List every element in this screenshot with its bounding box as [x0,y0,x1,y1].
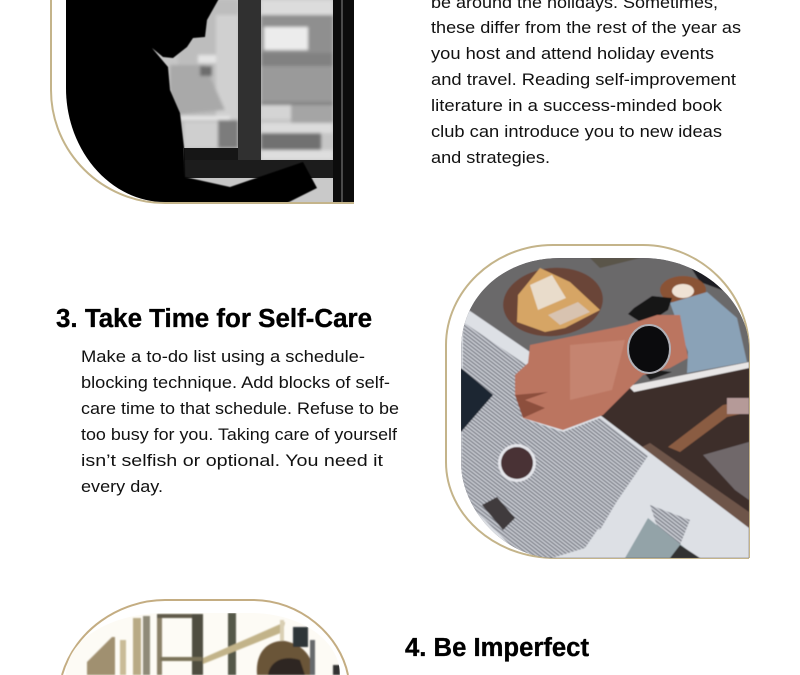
plate of food [502,268,604,336]
text block: point 3 body: care time to that schedule. Refuse to be [81,400,399,418]
text block: point 3 body [81,348,399,496]
table [461,258,749,385]
text block: point 2 body [431,0,741,167]
text block: point 2 body: you host and attend holiday events [431,45,714,63]
watch strap [628,296,672,325]
photo: wristwatch over a newspaper [446,245,749,558]
text block: point 2 body: and strategies. [431,149,550,167]
text block: point 3 body: every day. [81,478,163,496]
photo: person by a bright window [60,600,348,675]
text block: point 3 body: Make a to-do list using a schedule- [81,348,365,366]
latte cup [660,276,706,304]
photo: silhouette reading by a window [51,0,354,205]
text block: point 2 body: club can introduce you to new ideas [431,123,722,141]
text block: point 2 body: these differ from the rest of the year as [431,19,741,37]
heading: point 3: 3. Take Time for Self-Care [56,305,372,333]
dark wood lower right [602,368,749,512]
text block: point 3 body: too busy for you. Taking care of yourself [81,426,397,444]
arm and hand [515,315,688,430]
watch face [628,325,670,373]
newspaper body [461,305,749,558]
text block: point 3 body: isn’t selfish or optional. You need it [81,452,384,470]
text block: point 3 body: blocking technique. Add blocks of self- [81,374,390,392]
text block: point 2 body: and travel. Reading self-improvement [431,71,736,89]
newspaper photo inset [625,518,692,558]
heading: point 4: 4. Be Imperfect [405,634,590,662]
jumper sleeve [670,292,747,373]
text block: point 2 body: literature in a success-minded book [431,97,723,115]
